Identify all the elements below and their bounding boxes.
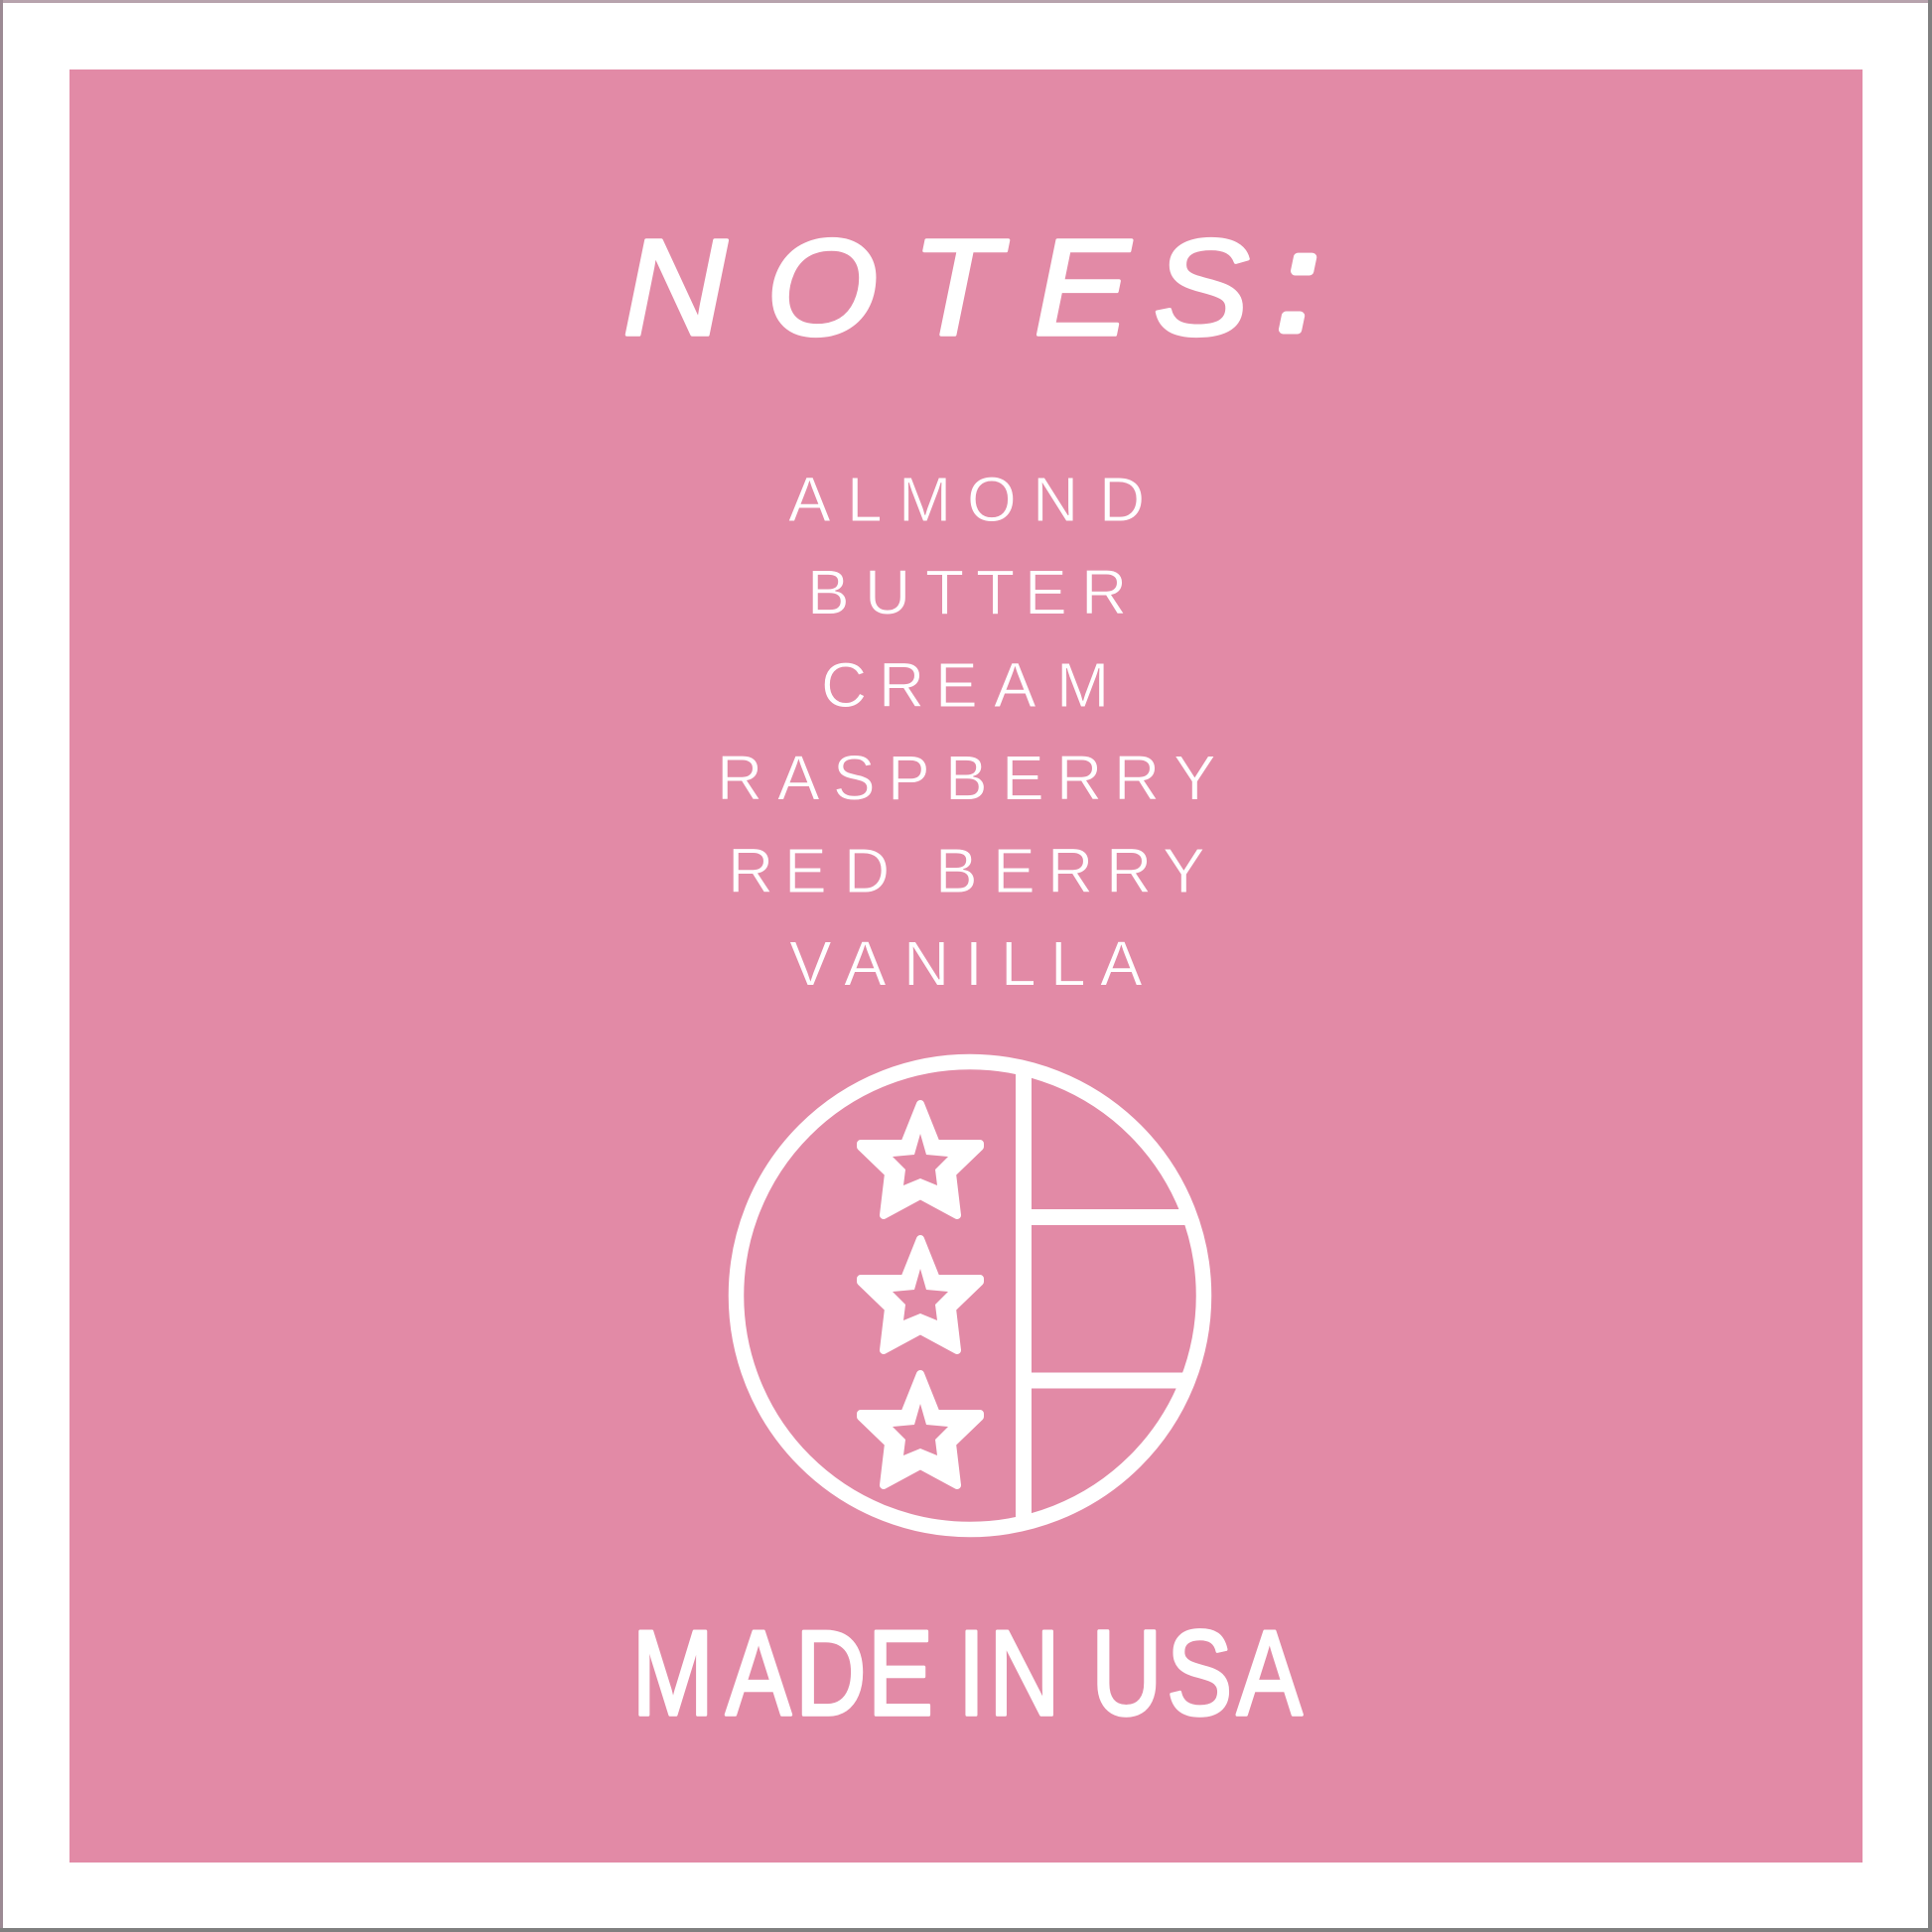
- note: vanilla: VANILLA: [789, 927, 1143, 999]
- note: raspberry: RASPBERRY: [717, 743, 1216, 814]
- icon: star 2: [861, 1239, 980, 1350]
- made in usa label: MADE IN USA: [632, 1605, 1303, 1740]
- icon: USA flag in circle: [737, 1062, 1203, 1529]
- icon: star 3: [861, 1374, 980, 1485]
- list of flavor notes: [717, 464, 1216, 999]
- note: butter: BUTTER: [807, 556, 1127, 627]
- title: NOTES: [622, 211, 1250, 364]
- note: cream: CREAM: [821, 649, 1109, 721]
- title: :: [1278, 207, 1317, 359]
- note: almond: ALMOND: [788, 464, 1145, 535]
- icon: star 1: [861, 1104, 980, 1215]
- icon: three stars: [861, 1104, 980, 1485]
- note: red berry: RED BERRY: [728, 835, 1205, 906]
